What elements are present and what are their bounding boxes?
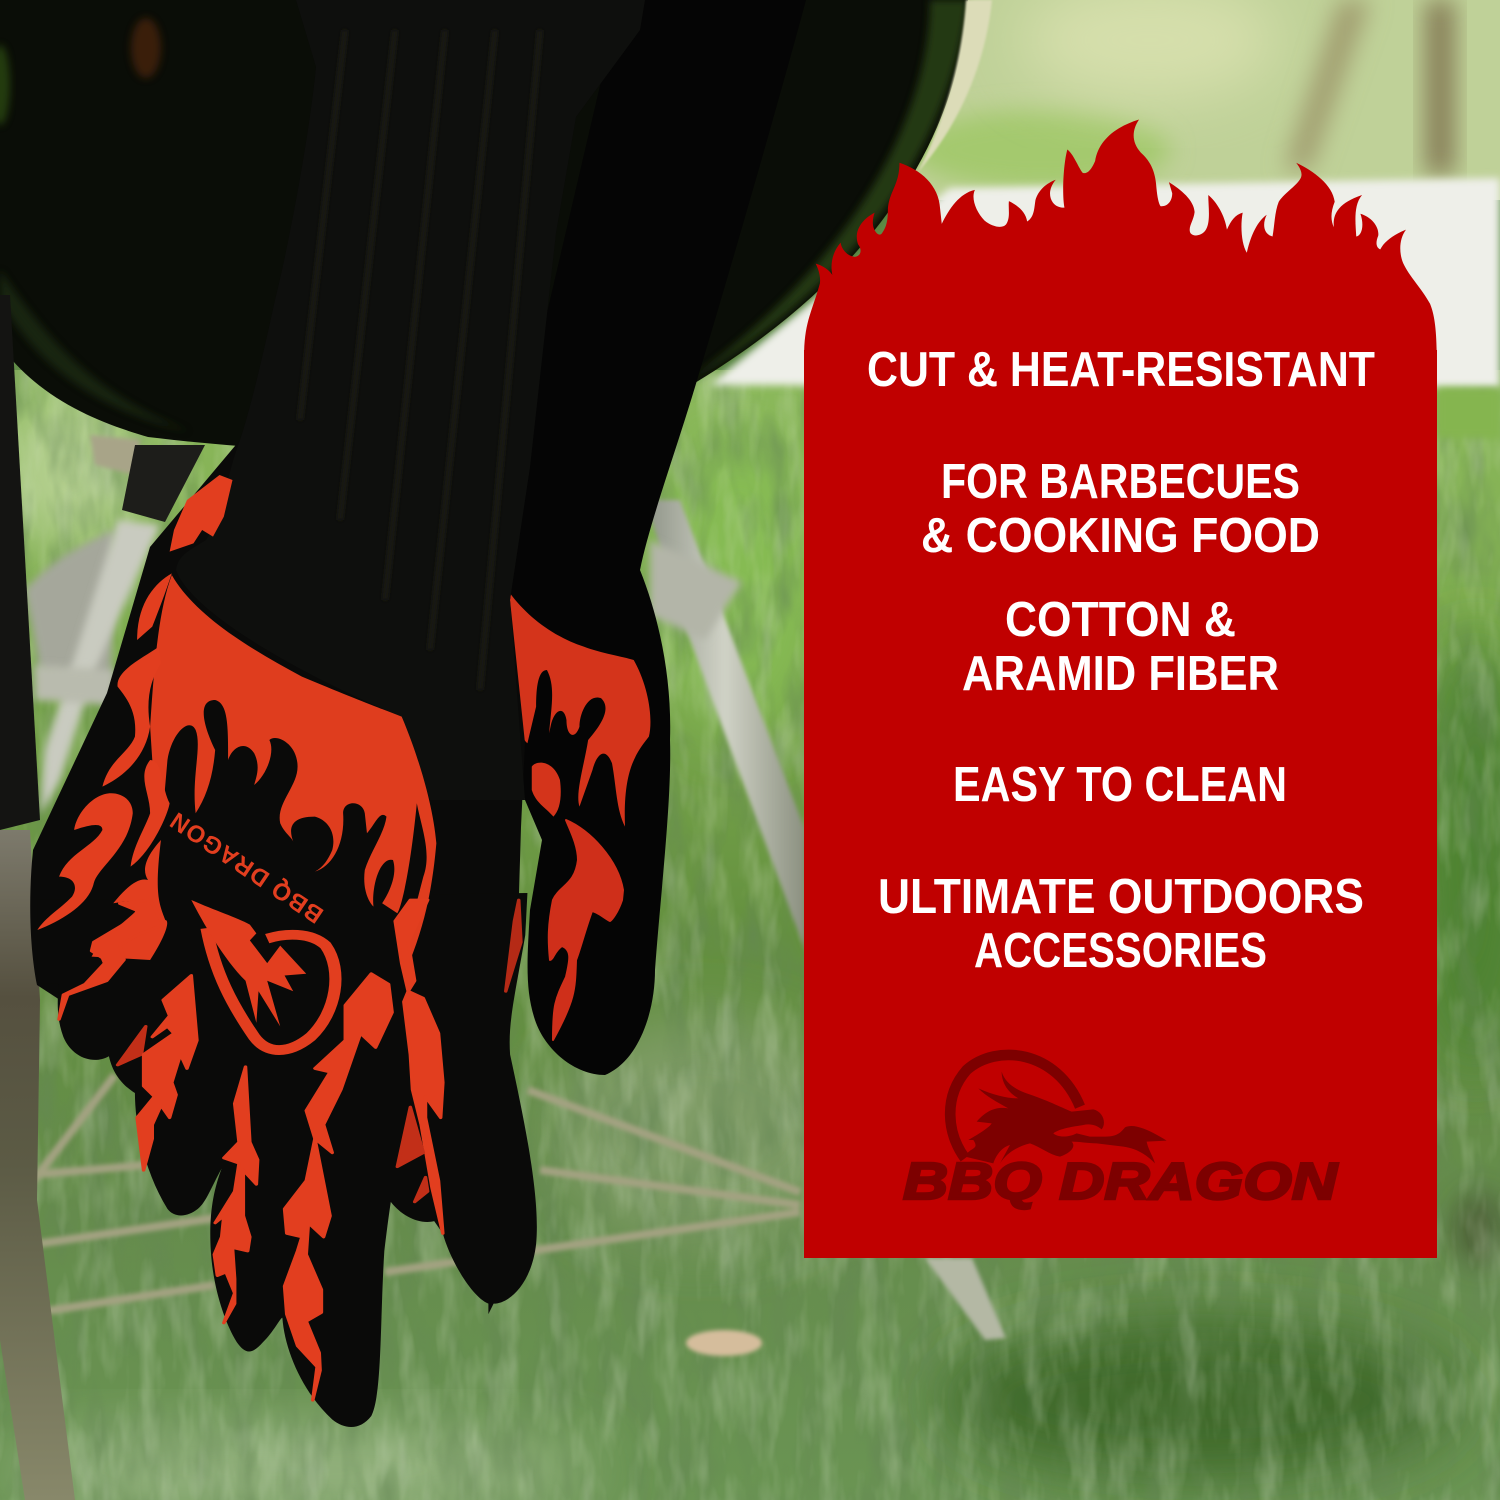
feature: barbecues and cooking: & COOKING FOOD — [921, 509, 1320, 563]
glove lettering: BBQ DRAGON — [166, 806, 328, 928]
glove body — [30, 0, 645, 1000]
photo: back glove — [480, 0, 806, 1075]
flame crest on panel — [804, 120, 1437, 351]
red panel body — [804, 350, 1437, 1258]
feature: barbecues and cooking: FOR BARBECUES — [941, 455, 1300, 509]
feature: cotton and aramid fiber — [962, 593, 1279, 701]
sleeve knit ribs — [300, 30, 540, 690]
feature: ultimate outdoors accessories: ACCESSORIES — [974, 924, 1267, 978]
photo: black kettle grill — [0, 0, 992, 522]
feature: ultimate outdoors accessories: ULTIMATE OUTDOORS — [878, 870, 1364, 924]
photo: main glove — [30, 0, 645, 1427]
feature: cut and heat resistant: CUT & HEAT-RESISTANT — [867, 343, 1375, 397]
finger flames — [59, 900, 521, 1400]
feature: barbecues and cooking — [921, 455, 1320, 563]
feature: ultimate outdoors accessories — [878, 870, 1364, 978]
photo background: grass lawn — [0, 370, 1500, 1500]
logo: ring — [950, 1055, 1080, 1158]
photo background: blurred trees and path — [710, 0, 1500, 438]
photo: grill legs and tray — [25, 500, 1006, 1340]
black tongues under band — [150, 700, 427, 960]
dragon crest on palm — [59, 900, 521, 1400]
feature: easy to clean: EASY TO CLEAN — [953, 758, 1287, 812]
fallen leaf — [686, 1330, 762, 1356]
flame band on back glove — [503, 593, 650, 827]
logo: dragon head and flame breath — [965, 1072, 1167, 1163]
glove fingers — [37, 893, 537, 1427]
cream glove lining — [640, 0, 765, 8]
logo: wordmark: BBQ DRAGON — [903, 1153, 1339, 1211]
feature: cotton and aramid fiber: COTTON & — [1005, 593, 1236, 647]
photo: tool handle at left edge — [0, 295, 75, 1500]
flame on back glove finger — [549, 820, 623, 1040]
BBQ Dragon logo — [903, 1055, 1339, 1211]
sleeve and cuff — [176, 0, 645, 800]
flame band on palm — [37, 475, 436, 960]
feature: cotton and aramid fiber: ARAMID FIBER — [962, 647, 1279, 701]
side flames — [37, 475, 233, 960]
